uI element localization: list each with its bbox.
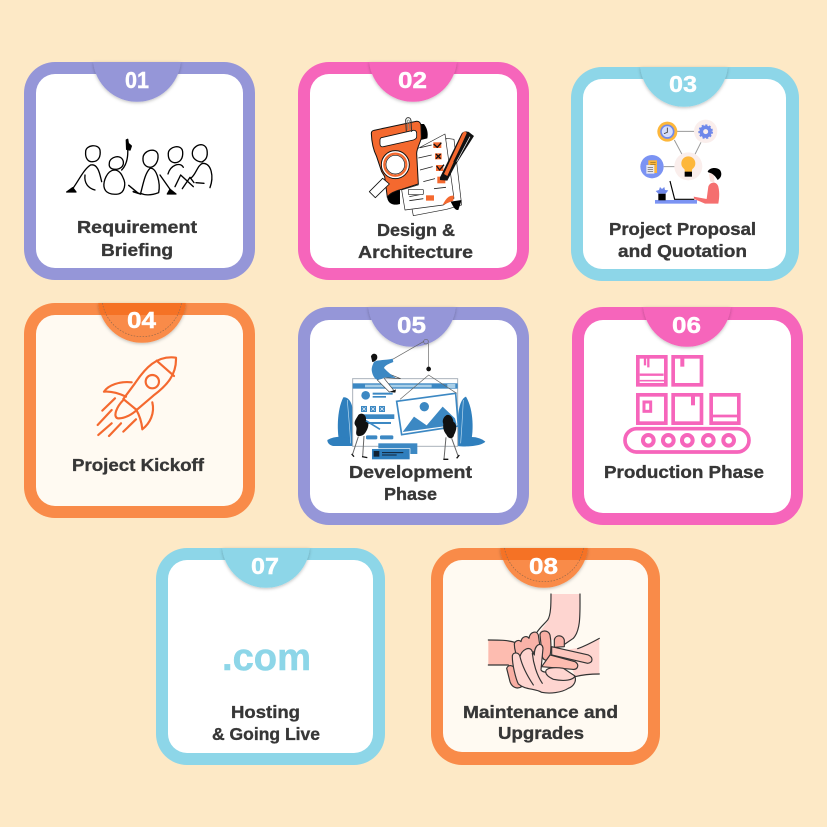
label: Design & Architecture: Design & [377,220,455,240]
panel: step 05 Development Phase [298,307,529,525]
label: Maintenance and Upgrades [463,702,618,743]
label: Requirement Briefing [77,217,197,260]
label: Design & Architecture [358,220,473,262]
number tab 02 [369,62,457,102]
label: Project Proposal and Quotation [609,219,756,261]
panel: step 07 Hosting & Going Live [156,548,385,765]
label: Hosting & Going Live: Hosting [231,702,300,722]
number tab 07 [222,548,310,588]
label: Production Phase: Production Phase [604,462,764,482]
label: Design & Architecture: Architecture [358,242,473,262]
number tab 03 [640,67,728,107]
panel: step 03 Project Proposal and Quotation [571,67,799,281]
label: Development Phase [349,462,472,504]
label: Maintenance and Upgrades: Upgrades [498,723,584,743]
number tab 08 [500,548,588,588]
number tab 04 [98,303,186,343]
number tab 06 [643,307,731,347]
number 08: 08 [529,553,558,579]
label: Project Proposal and Quotation: and Quotation [618,241,747,261]
label: Hosting & Going Live: & Going Live [212,724,320,744]
label: Requirement Briefing: Requirement [77,217,197,237]
icon: team assembling a web page [327,339,485,460]
icon: boxes on conveyor belt [625,357,749,452]
panel: step 06 Production Phase [572,307,803,525]
number 04: 04 [127,307,156,333]
icon: clipboard, checklist and magnifier [369,118,474,216]
number tab 01 [93,62,181,102]
panel: step 02 Design & Architecture [298,62,529,280]
number 03: 03 [669,71,697,97]
label: Development Phase: Phase [384,484,437,504]
number 02: 02 [398,67,427,93]
panel: step 01 Requirement Briefing [24,62,255,280]
number tab 05 [368,307,456,347]
icon: rocket [98,357,176,436]
label: Project Kickoff: Project Kickoff [72,455,204,475]
label: Requirement Briefing: Briefing [101,240,173,260]
number 07: 07 [251,553,279,579]
icon: person at laptop with idea network [640,120,721,204]
label: Project Proposal and Quotation: Project Proposal [609,219,756,239]
panel: step 08 Maintenance and Upgrades [431,548,660,765]
number 06: 06 [672,312,701,338]
icon: .com domain text: .com [222,637,311,679]
number 05: 05 [397,312,426,338]
label: Development Phase: Development [349,462,472,482]
number 01: 01 [125,67,149,93]
icon: sketched group of people [67,139,212,195]
label: Maintenance and Upgrades: Maintenance and [463,702,618,722]
panel: step 04 Project Kickoff [24,303,255,518]
label: Hosting & Going Live [212,702,320,744]
icon: stacked hands [488,594,599,693]
